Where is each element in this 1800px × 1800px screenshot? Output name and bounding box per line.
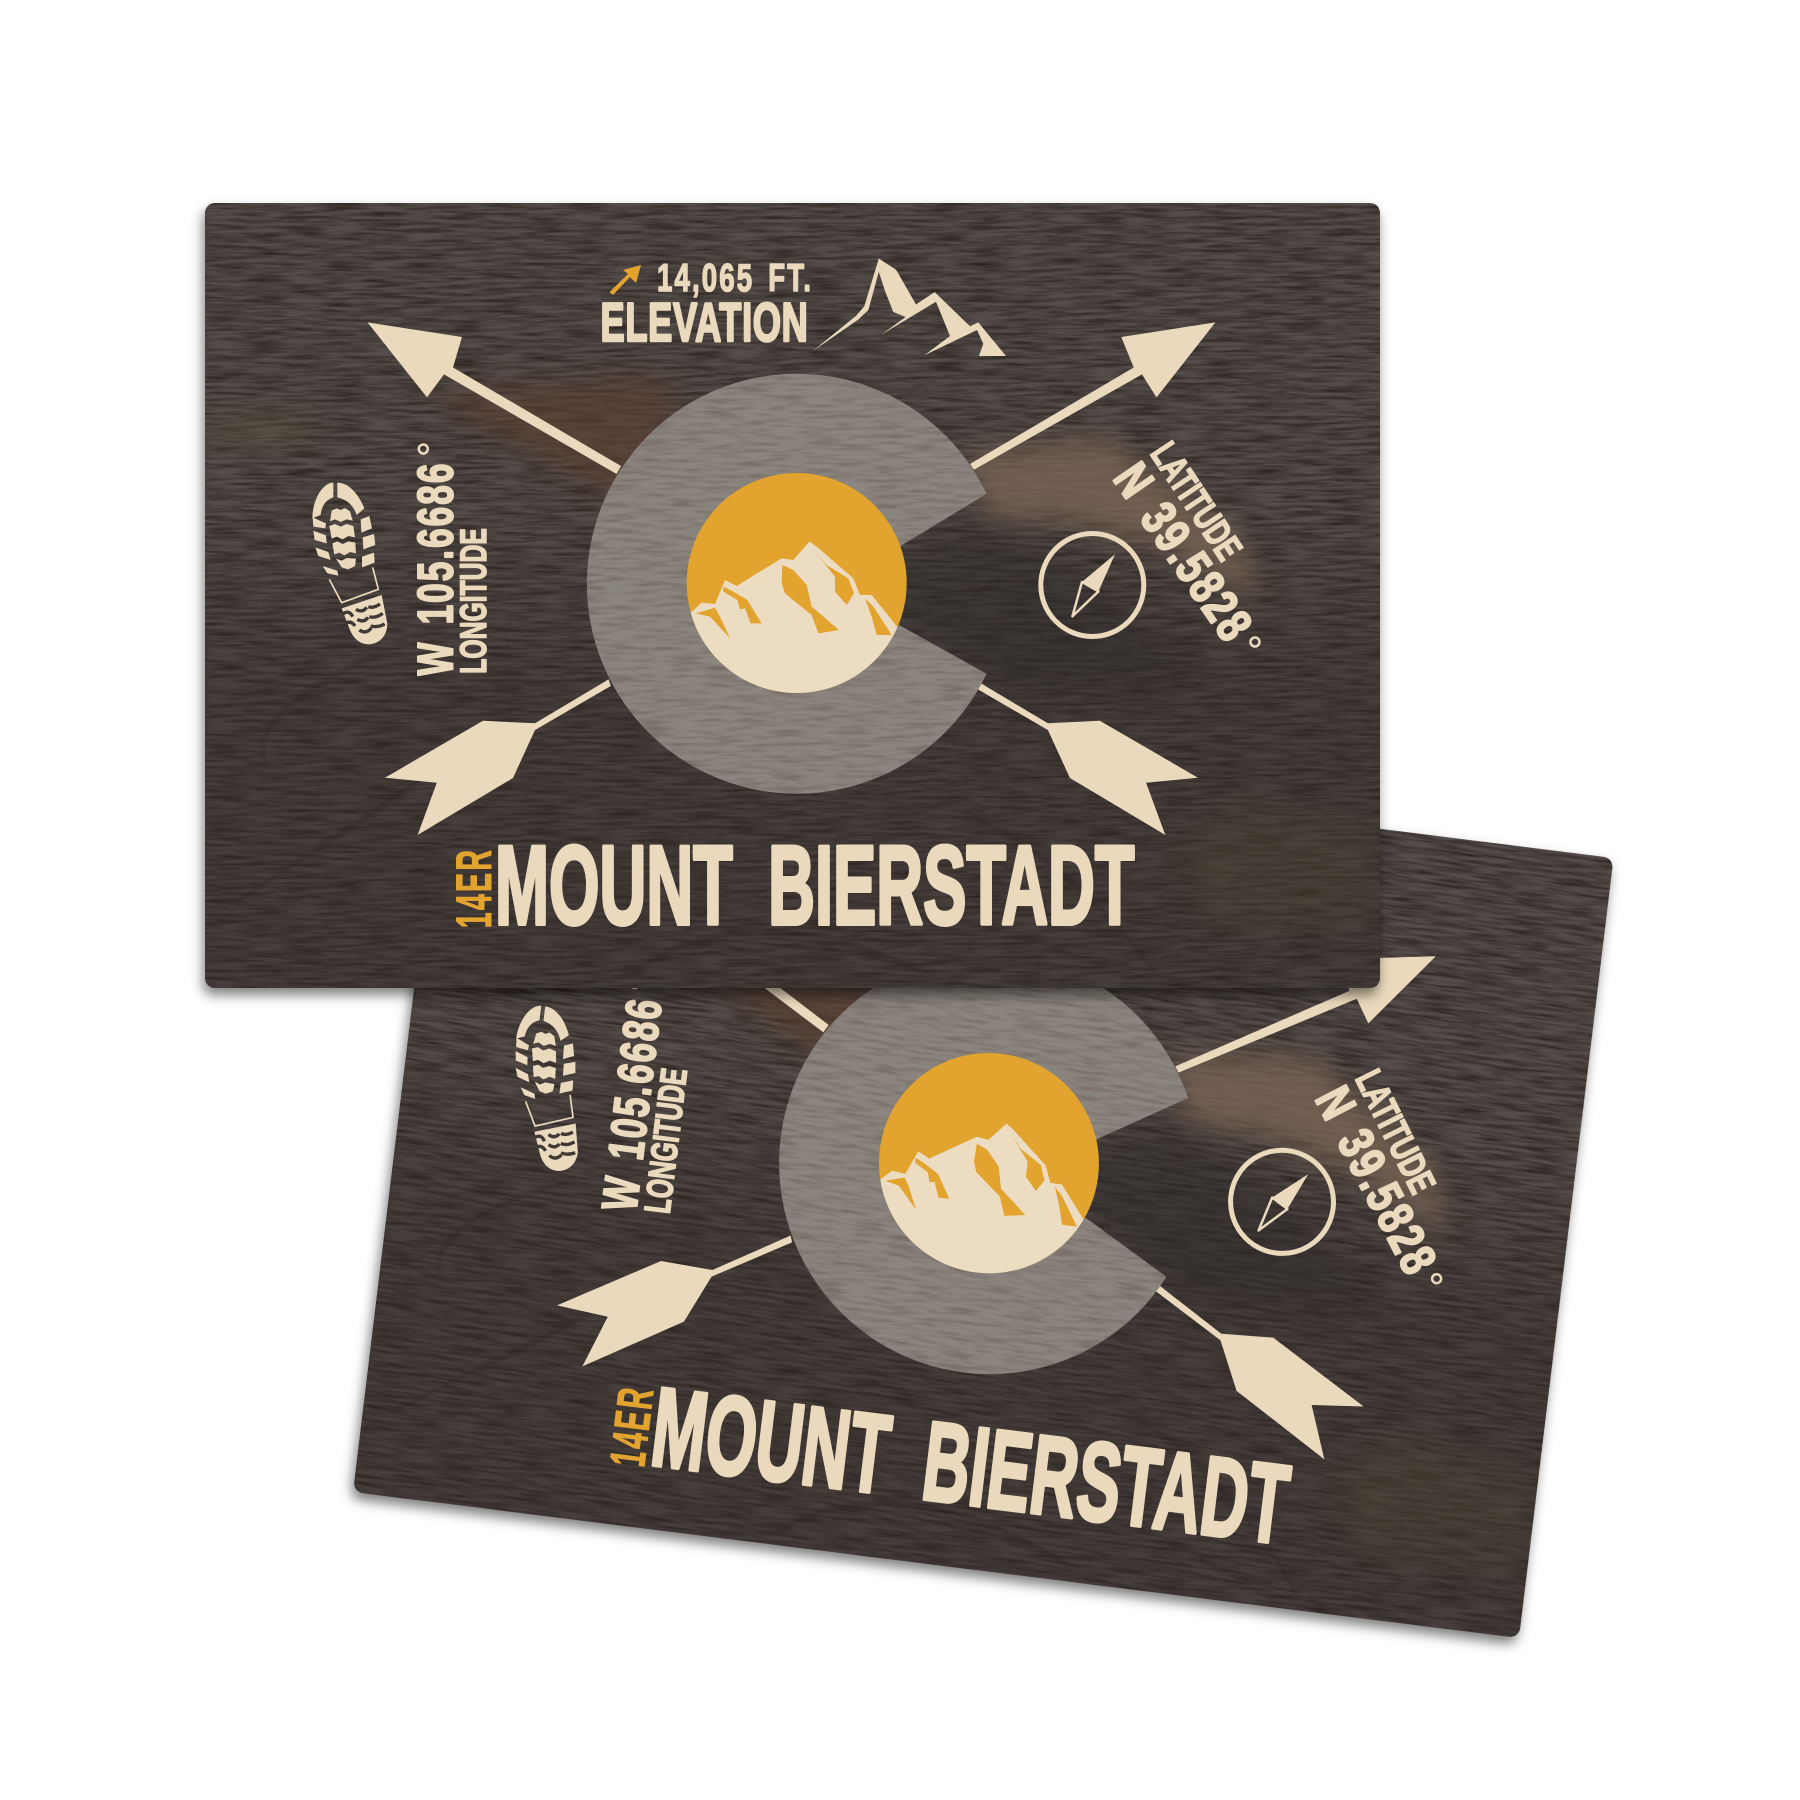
title: MOUNT BIERSTADT bbox=[495, 823, 1134, 948]
card board bbox=[205, 203, 1380, 988]
card board bbox=[353, 712, 1614, 1638]
icon: compass bbox=[1041, 534, 1144, 636]
sun with mountain bbox=[879, 1053, 1099, 1274]
elevation value: 14,065 FT. bbox=[657, 257, 813, 300]
elevation label: ELEVATION bbox=[600, 291, 808, 353]
arrow: bottom right bbox=[972, 679, 1198, 835]
icon: boot print bbox=[501, 1003, 595, 1173]
colorado C bbox=[755, 929, 1203, 1396]
icon: boot print bbox=[312, 483, 387, 644]
arrow: top left bbox=[368, 322, 621, 474]
front card bbox=[205, 203, 1380, 988]
background landscape bbox=[354, 988, 1564, 1637]
elevation value: 14,065 FT. bbox=[884, 822, 1044, 884]
back card bbox=[353, 712, 1614, 1638]
latitude value: N 39.5828 bbox=[1304, 1078, 1448, 1285]
longitude value: W 105.6686 bbox=[407, 462, 463, 676]
latitude value bbox=[1103, 453, 1264, 653]
background landscape bbox=[205, 378, 1380, 988]
14er tag: 14ER bbox=[446, 848, 502, 928]
arrow: bottom left bbox=[550, 1208, 793, 1390]
title: MOUNT BIERSTADT bbox=[646, 1364, 1295, 1568]
arrow: bottom right bbox=[1133, 1281, 1375, 1463]
arrow: top left bbox=[576, 851, 846, 1033]
14er tag: 14ER bbox=[599, 1383, 665, 1470]
latitude label: LATITUDE bbox=[1142, 435, 1250, 568]
colorado C bbox=[587, 374, 987, 794]
icon: small orange arrow bbox=[610, 265, 641, 295]
latitude value: N 39.5828 bbox=[1103, 453, 1264, 653]
arrow: top right bbox=[1175, 926, 1436, 1103]
longitude label: LONGITUDE bbox=[636, 1066, 695, 1216]
icon: mountain outline bbox=[1032, 843, 1236, 964]
sun with mountain bbox=[680, 473, 913, 703]
arrow: bottom left bbox=[385, 679, 611, 835]
longitude label: LONGITUDE bbox=[452, 528, 494, 674]
elevation label: ELEVATION bbox=[822, 849, 1036, 936]
icon: small orange arrow bbox=[838, 824, 873, 858]
icon: mountain outline bbox=[812, 258, 1006, 356]
longitude value bbox=[591, 977, 675, 1214]
latitude value bbox=[1284, 1072, 1469, 1290]
longitude value: W 105.6686 bbox=[591, 994, 673, 1214]
icon: compass bbox=[1225, 1144, 1339, 1259]
latitude label: LATITUDE bbox=[1346, 1063, 1443, 1200]
arrow: top right bbox=[970, 322, 1215, 470]
